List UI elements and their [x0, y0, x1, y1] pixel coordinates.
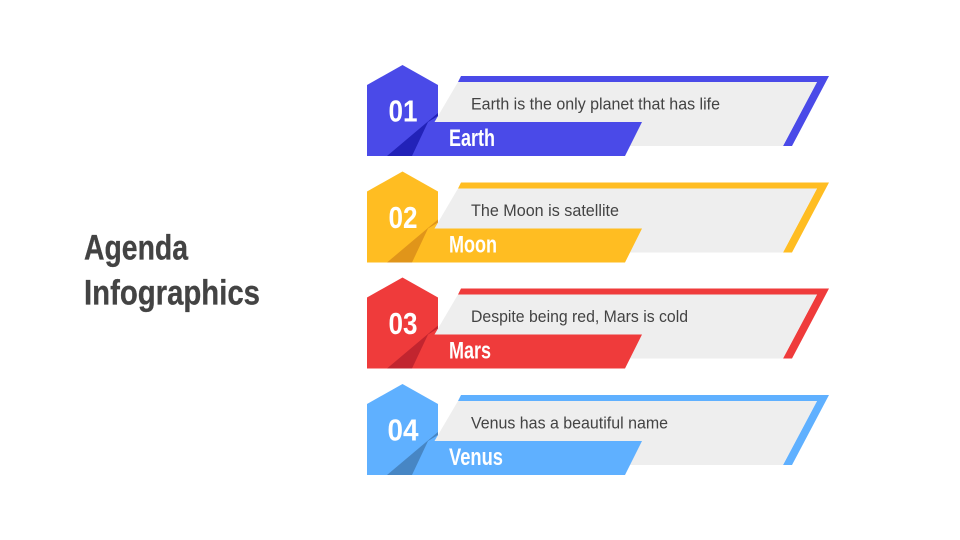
name bar — [412, 122, 642, 156]
fold shadow — [387, 326, 438, 368]
agenda item 04: Venus — [367, 384, 829, 475]
name bar — [412, 334, 642, 368]
hexagon — [367, 278, 438, 368]
grey panel — [430, 82, 817, 146]
fold shadow — [387, 113, 438, 156]
title — [84, 228, 260, 312]
number: 02 — [388, 200, 418, 235]
top stripe — [458, 395, 829, 465]
description: Despite being red, Mars is cold — [471, 308, 688, 326]
description: Earth is the only planet that has life — [471, 96, 720, 114]
grey panel — [430, 401, 817, 465]
agenda item 01: Earth — [367, 65, 829, 156]
number: 04 — [388, 412, 419, 448]
top stripe — [458, 76, 829, 146]
title: Infographics — [84, 274, 260, 312]
name: Venus — [449, 444, 503, 471]
name bar — [412, 441, 642, 475]
name: Mars — [449, 338, 491, 364]
name bar — [412, 228, 642, 262]
name: Earth — [449, 125, 495, 152]
number: 03 — [388, 306, 418, 341]
name: Moon — [449, 232, 497, 258]
grey panel — [430, 294, 817, 358]
hexagon — [367, 65, 438, 156]
fold shadow — [387, 220, 438, 262]
agenda item 03: Mars — [367, 278, 829, 368]
fold shadow — [387, 432, 438, 475]
hexagon — [367, 384, 438, 475]
top stripe — [458, 182, 829, 252]
number: 01 — [388, 94, 418, 128]
title: Agenda — [84, 228, 188, 268]
top stripe — [458, 288, 829, 358]
description: Venus has a beautiful name — [471, 414, 668, 432]
description: The Moon is satellite — [471, 202, 619, 220]
grey panel — [430, 188, 817, 252]
agenda item 02: Moon — [367, 172, 829, 262]
hexagon — [367, 172, 438, 262]
